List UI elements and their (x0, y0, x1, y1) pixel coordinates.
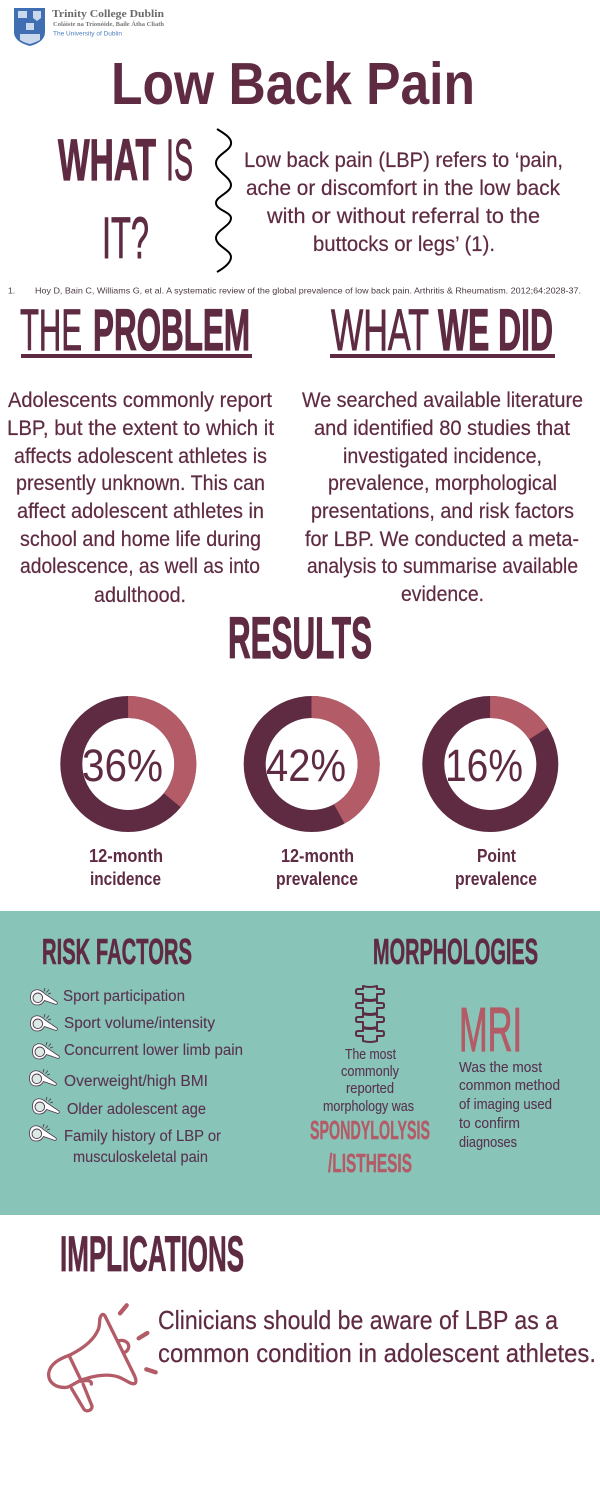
donut chart: 16% point prevalence (433, 707, 547, 889)
callout: spondylolysis/listhesis: /LISTHESIS (328, 1148, 412, 1178)
callout: spondylolysis/listhesis (310, 1115, 430, 1178)
heading: the problem: PROBLEM (93, 298, 250, 363)
text block: most common morphology: The most (345, 1047, 396, 1063)
title: Low Back Pain (111, 51, 475, 117)
heading: what is it: IT? (102, 206, 149, 271)
text block: the problem: LBP, but the extent to which it (7, 417, 274, 440)
text block: imaging: of imaging used (459, 1097, 552, 1113)
icon: megaphone (49, 1305, 156, 1411)
logo text (52, 9, 165, 38)
callout: spondylolysis/listhesis: SPONDYLOLYSIS (310, 1115, 430, 1145)
reference: 1. (8, 286, 15, 296)
text block: the problem: adulthood. (94, 584, 186, 607)
text block: the problem: affects adolescent athletes is (14, 445, 267, 468)
list: overweight (30, 1069, 208, 1090)
list: older age (32, 1097, 206, 1118)
list: concurrent pain: Concurrent lower limb pain (64, 1042, 243, 1059)
donut chart: 42% 12-month prevalence: prevalence (276, 869, 358, 889)
text block: imaging (459, 1060, 560, 1151)
reference: Hoy D, Bain C, Williams G, et al. A systematic review of the global prevalence of low back pain. Arthritis & Rheumatism. 2012;64:2028-37. (35, 286, 581, 296)
donut chart: 42% 12-month prevalence (255, 707, 369, 889)
list: family history: Family history of LBP or (64, 1128, 221, 1145)
list: sport participation: Sport participation (63, 988, 185, 1005)
logo text: The University of Dublin (53, 30, 122, 38)
text block: what we did: prevalence, morphological (328, 472, 557, 495)
text block: imaging: to confirm (459, 1116, 520, 1132)
donut chart: 16% point prevalence: Point (477, 846, 516, 866)
callout: MRI: MRI (459, 996, 522, 1065)
text block: the problem: school and home life during (20, 528, 261, 551)
text block: what we did: presentations, and risk factors (311, 500, 574, 523)
text block: definition (244, 149, 563, 256)
text block: most common morphology: reported (346, 1081, 394, 1097)
heading: what is it: WHAT (58, 128, 156, 193)
list: sport volume: Sport volume/intensity (64, 1015, 215, 1032)
icon: crest shield (14, 8, 45, 46)
donut chart: 42% 12-month prevalence: 12-month (281, 846, 354, 866)
list: older age: Older adolescent age (67, 1101, 206, 1118)
text: IS (166, 128, 193, 193)
text block: the problem (7, 389, 274, 607)
text block: imaging: Was the most (459, 1060, 542, 1076)
donut chart: 16% point prevalence: 16% (445, 740, 523, 791)
text block: definition: buttocks or legs’ (1). (313, 233, 495, 256)
heading: the problem: THE (20, 298, 82, 363)
text block: definition: Low back pain (LBP) refers to ‘pain, (244, 149, 563, 172)
text block: most common morphology: morphology was (323, 1099, 414, 1115)
icon: spine (356, 986, 384, 1042)
text block: imaging: diagnoses (459, 1135, 517, 1151)
text block: what we did (302, 389, 583, 606)
text block: what we did: analysis to summarise available (307, 555, 578, 578)
logo text: Coláiste na Tríonóide, Baile Átha Cliath (53, 20, 165, 28)
text block: the problem: affect adolescent athletes in (17, 500, 264, 523)
donut chart: 36% 12-month incidence: 36% (82, 740, 163, 791)
text block: what we did: We searched available literature (302, 389, 583, 412)
panel: risk factors and morphologies (0, 911, 600, 1215)
text block: imaging: common method (459, 1078, 560, 1094)
donut chart: 36% 12-month incidence: incidence (90, 869, 161, 889)
heading: risk factors: RISK FACTORS (42, 931, 192, 972)
text block: most common morphology (323, 1047, 414, 1115)
text block: definition: with or without referral to the (266, 205, 540, 228)
text block: definition: ache or discomfort in the low back (246, 177, 560, 200)
squiggle divider (216, 129, 231, 272)
text block: what we did: investigated incidence, (343, 445, 542, 468)
text block: implications: Clinicians should be aware of LBP as a (158, 1305, 558, 1335)
heading: what is it (58, 128, 193, 271)
text block: implications (158, 1305, 596, 1368)
donut chart: 42% 12-month prevalence: 42% (266, 740, 346, 791)
text block: what we did: evidence. (401, 583, 484, 606)
text block: the problem: Adolescents commonly report (8, 389, 272, 412)
text block: most common morphology: commonly (341, 1064, 400, 1080)
list: family history: musculoskeletal pain (73, 1149, 208, 1166)
heading: what we did: WHAT (331, 298, 429, 363)
donut chart: 36% 12-month incidence (71, 707, 185, 889)
logo text: Trinity College Dublin (52, 9, 164, 20)
text block: what we did: and identified 80 studies that (314, 417, 570, 440)
donut chart: 16% point prevalence: prevalence (455, 869, 537, 889)
text block: the problem: adolescence, as well as into (20, 555, 260, 578)
text block: what we did: for LBP. We conducted a meta- (305, 528, 579, 551)
heading: implications: IMPLICATIONS (60, 1226, 244, 1282)
heading: results: RESULTS (228, 606, 372, 671)
text block: the problem: presently unknown. This can (16, 472, 265, 495)
logo: Trinity College Dublin (14, 8, 165, 46)
heading: the problem (20, 298, 252, 363)
list: family history (30, 1124, 221, 1166)
list: overweight: Overweight/high BMI (64, 1073, 208, 1090)
donut chart: 36% 12-month incidence: 12-month (89, 846, 163, 866)
